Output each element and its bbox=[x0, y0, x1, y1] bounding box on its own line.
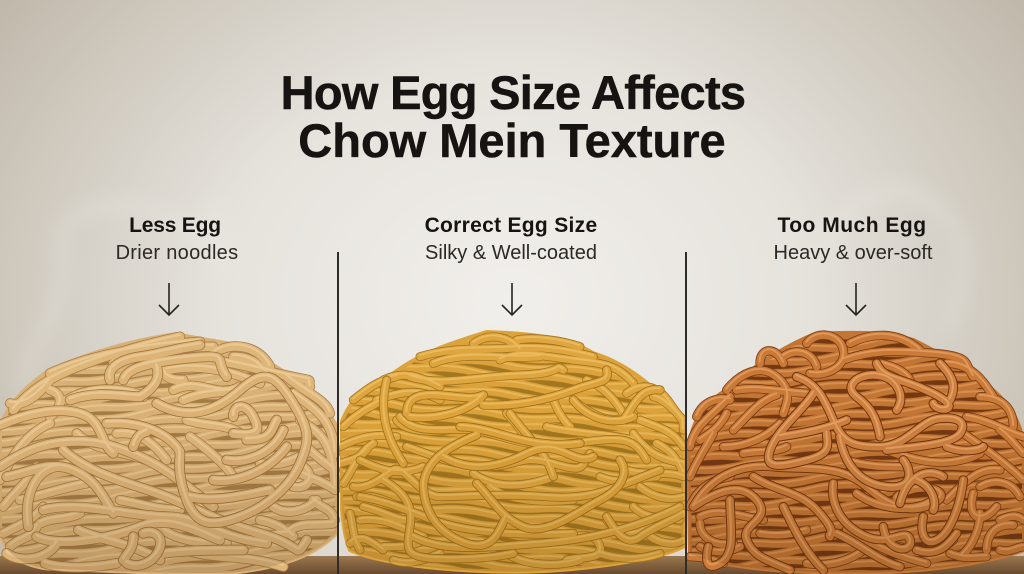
noodle pile: correct egg size bbox=[340, 332, 683, 572]
divider lines bbox=[338, 252, 686, 574]
wooden table surface bbox=[0, 556, 1024, 574]
steam wisps bbox=[20, 190, 964, 390]
noodle pile: less egg bbox=[0, 334, 337, 573]
title: Chow Mein Texture bbox=[298, 114, 726, 167]
title bbox=[281, 66, 745, 167]
arrow: too much egg bbox=[846, 283, 866, 315]
label: correct egg size: Correct Egg Size bbox=[425, 214, 597, 237]
arrow: less egg bbox=[159, 283, 179, 315]
label: too much egg bbox=[774, 214, 933, 264]
noodle pile: too much egg bbox=[688, 333, 1024, 573]
label: too much egg: Heavy & over-soft bbox=[774, 242, 933, 264]
label: correct egg size bbox=[425, 214, 597, 264]
label: too much egg: Too Much Egg bbox=[777, 214, 927, 237]
label: less egg: Less Egg bbox=[129, 214, 221, 237]
arrow: correct egg size bbox=[502, 283, 522, 315]
title: How Egg Size Affects bbox=[281, 66, 745, 119]
label: correct egg size: Silky & Well-coated bbox=[425, 242, 597, 264]
label: less egg bbox=[116, 214, 238, 264]
label: less egg: Drier noodles bbox=[116, 242, 238, 264]
